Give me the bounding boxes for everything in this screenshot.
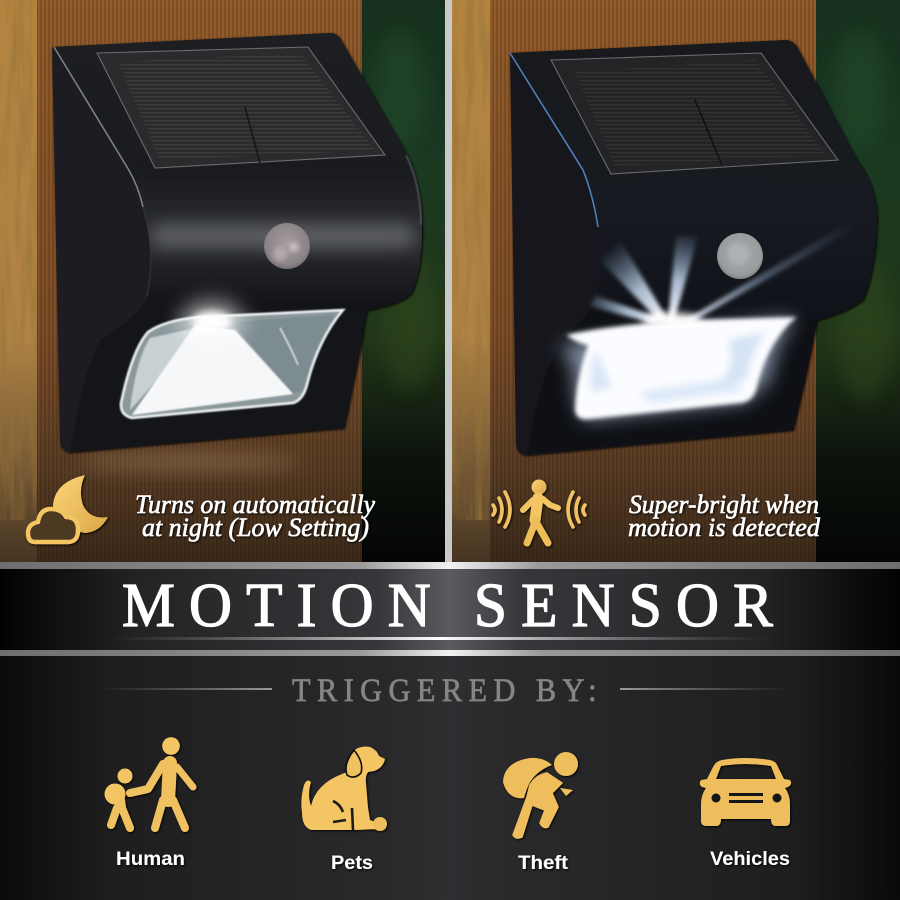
panel: low setting at night [0, 0, 445, 562]
post and foliage background [0, 0, 445, 562]
title band [0, 562, 900, 656]
panel: super-bright on motion [452, 0, 900, 562]
hood highlight [152, 224, 414, 248]
caption: low setting: Turns on automatically [135, 490, 375, 519]
icon: dog with ball [301, 747, 387, 831]
subheading: TRIGGERED BY: [292, 672, 597, 708]
lamp flare [642, 313, 702, 327]
PIR sensor [717, 233, 763, 279]
wall light, bright setting [510, 40, 877, 455]
lamp glow [178, 298, 246, 346]
lens [121, 310, 343, 418]
icon: car [700, 758, 791, 826]
post and foliage background [452, 0, 900, 562]
label: pets: Pets [331, 852, 373, 874]
label: theft: Theft [518, 852, 569, 874]
icon: human adult and child [104, 737, 193, 828]
PIR sensor [264, 223, 310, 269]
label: vehicles: Vehicles [710, 848, 790, 870]
light rays [590, 230, 844, 324]
panel: triggered by [0, 656, 900, 900]
icon: moon and cloud [28, 475, 108, 542]
icon: motion waves and walking person [493, 480, 585, 543]
solar panel [551, 53, 838, 174]
lit lens [566, 317, 797, 419]
icon: thief with sack [503, 752, 578, 838]
caption: bright setting: Super-bright when [629, 490, 819, 519]
caption: low setting: at night (Low Setting) [142, 513, 369, 542]
solar panel [97, 47, 385, 168]
divider [445, 0, 452, 562]
caption: bright setting: motion is detected [628, 513, 821, 542]
title: MOTION SENSOR [122, 572, 773, 640]
lens glow [560, 317, 797, 420]
wall light, low setting [52, 33, 422, 452]
label: human: Human [116, 848, 185, 870]
